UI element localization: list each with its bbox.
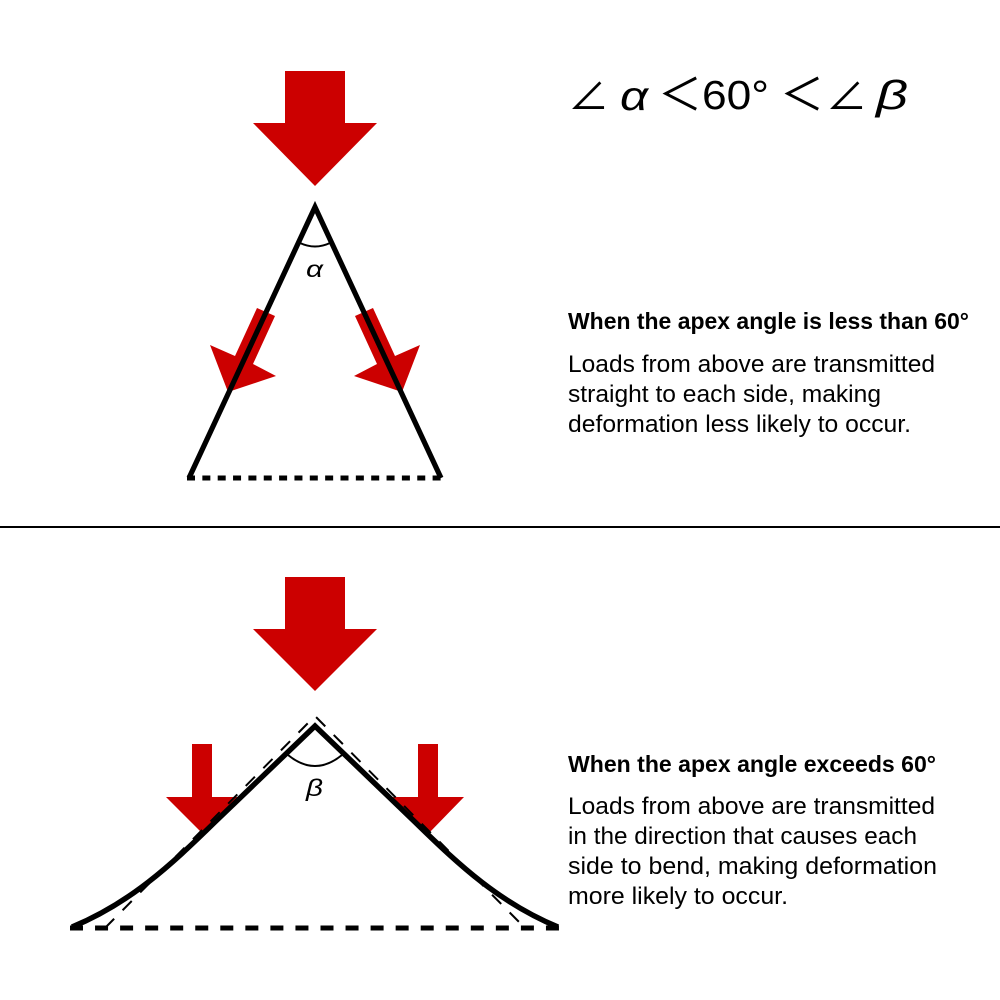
bent sides — [72, 726, 558, 927]
divider — [0, 526, 1000, 528]
angle arc beta — [288, 755, 342, 766]
arrow: main load from above — [253, 577, 377, 691]
arrow: main load from above — [253, 71, 377, 186]
formula: angle comparison: ∠ — [826, 62, 867, 122]
formula: angle comparison: ＜ — [780, 59, 824, 123]
original straight sides, dashed — [105, 716, 525, 928]
body: less than 60: straight to each side, making — [568, 381, 881, 408]
formula: angle comparison — [568, 59, 908, 123]
formula: angle comparison: ∠ — [568, 62, 609, 122]
text block: apex angle exceeds 60 — [568, 751, 937, 910]
body: less than 60 — [568, 351, 935, 438]
formula: angle comparison: ＜ — [658, 59, 702, 123]
angle arc alpha — [300, 243, 330, 246]
body: exceeds 60: in the direction that causes each — [568, 823, 917, 850]
angle label beta: β — [305, 775, 323, 802]
triangle dashed base — [187, 476, 443, 480]
formula: angle comparison: β — [875, 72, 908, 118]
body: less than 60: Loads from above are transmitted — [568, 351, 935, 378]
body: exceeds 60: Loads from above are transmitted — [568, 793, 935, 820]
formula: angle comparison: 60° — [702, 72, 769, 118]
triangle sides — [189, 207, 441, 478]
arrow: vertical load on left side — [166, 744, 238, 833]
body: exceeds 60 — [568, 793, 937, 910]
body: exceeds 60: side to bend, making deformation — [568, 853, 937, 880]
angle label alpha: α — [306, 256, 324, 282]
arrow: vertical load on right side — [392, 744, 464, 833]
heading: less than 60: When the apex angle is less than 60° — [568, 308, 969, 334]
panel: apex angle less than 60 degrees — [187, 71, 443, 478]
body: exceeds 60: more likely to occur. — [568, 883, 788, 910]
arrow: load along left side — [210, 308, 276, 392]
heading: exceeds 60: When the apex angle exceeds 60° — [568, 751, 936, 777]
dashed base — [70, 926, 560, 930]
body: less than 60: deformation less likely to occur. — [568, 411, 911, 438]
panel: apex angle exceeds 60 degrees — [70, 577, 560, 928]
text block: apex angle less than 60 — [568, 308, 969, 438]
arrow: load along right side — [354, 308, 420, 392]
formula: angle comparison: α — [620, 73, 650, 119]
